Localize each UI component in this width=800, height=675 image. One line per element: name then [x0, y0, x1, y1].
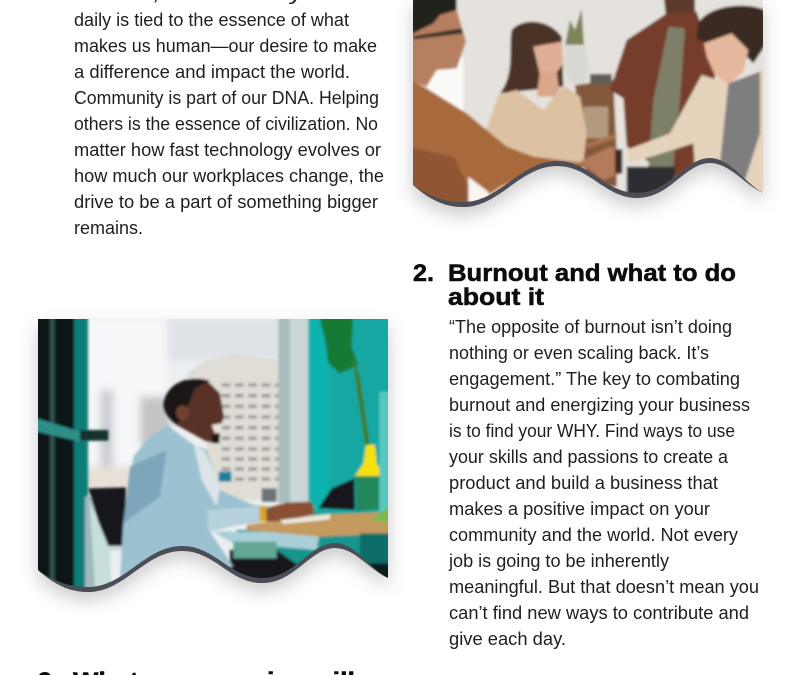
- text block: community and purpose paragraph: how much our workplaces change, the: [74, 166, 384, 186]
- heading: 2. Burnout and what to do about it: about it: [448, 284, 544, 311]
- text block: community and purpose paragraph: drive to be a part of something bigger: [74, 192, 378, 212]
- vase: [355, 445, 384, 476]
- text block: burnout paragraph: “The opposite of burnout isn’t doing: [449, 317, 732, 337]
- clasped hands: [580, 147, 622, 180]
- building: [187, 353, 280, 500]
- text block: burnout paragraph: nothing or even scaling back. It’s: [449, 343, 709, 363]
- plant: [565, 8, 584, 45]
- text block: community and purpose paragraph: matter how fast technology evolves or: [74, 140, 381, 160]
- text block: burnout paragraph: burnout and energizing your business: [449, 395, 750, 415]
- phone: [318, 478, 355, 510]
- text block: burnout paragraph: community and the world. Not every: [449, 525, 738, 545]
- text block: burnout paragraph: job is going to be inherently: [448, 551, 669, 571]
- text block: burnout paragraph: give each day.: [449, 629, 566, 649]
- text block: burnout paragraph: meaningful. But that doesn’t mean you: [449, 577, 759, 597]
- text block: burnout paragraph: your skills and passions to create a: [449, 447, 729, 467]
- text block: community and purpose paragraph: a difference and impact the world.: [74, 62, 350, 82]
- legs: [230, 550, 300, 583]
- right woman: [696, 6, 767, 63]
- man at back: [662, 0, 696, 16]
- text block: community and purpose paragraph: remains.: [74, 218, 143, 238]
- glass divider: [379, 392, 389, 512]
- woman in blouse: [500, 22, 563, 93]
- text block: community and purpose paragraph: others is the essence of civilization. No: [74, 114, 378, 134]
- head: [177, 380, 224, 443]
- wrist and hand: [259, 506, 267, 521]
- text block: community and purpose paragraph: [74, 0, 384, 238]
- text block: community and purpose paragraph: daily is tied to the essence of what: [74, 10, 349, 30]
- heading: 2. Burnout and what to do about it: [413, 260, 736, 311]
- text block: burnout paragraph: is to find your WHY. Find ways to use: [449, 421, 735, 441]
- text block: community and purpose paragraph: Community is part of our DNA. Helping: [74, 88, 379, 108]
- window frames and wall: [278, 313, 293, 503]
- text block: burnout paragraph: engagement.” The key to combating: [449, 369, 740, 389]
- left door frame: [30, 313, 85, 600]
- leaf and stem: [318, 313, 358, 373]
- heading: 2. Burnout and what to do about it: 2.: [413, 260, 434, 287]
- jacket: [120, 425, 273, 580]
- text block: burnout paragraph: can’t find new ways to contribute and: [449, 603, 749, 623]
- chair: [88, 487, 126, 550]
- desk and under-desk: [235, 528, 361, 570]
- man at left: [413, 0, 458, 36]
- shelf: [575, 80, 618, 187]
- photo: team handshake with wavy bottom edge: [407, 0, 770, 215]
- text block: burnout paragraph: product and build a business that: [449, 473, 718, 493]
- text block: burnout paragraph: [448, 317, 759, 649]
- heading: 2. Burnout and what to do about it: Burnout and what to do: [448, 260, 736, 287]
- text block: community and purpose paragraph: makes us human—our desire to make: [74, 36, 377, 56]
- photo: smiling man at desk with wavy bottom edge: [30, 313, 397, 600]
- text block: burnout paragraph: makes a positive impact on your: [449, 499, 710, 519]
